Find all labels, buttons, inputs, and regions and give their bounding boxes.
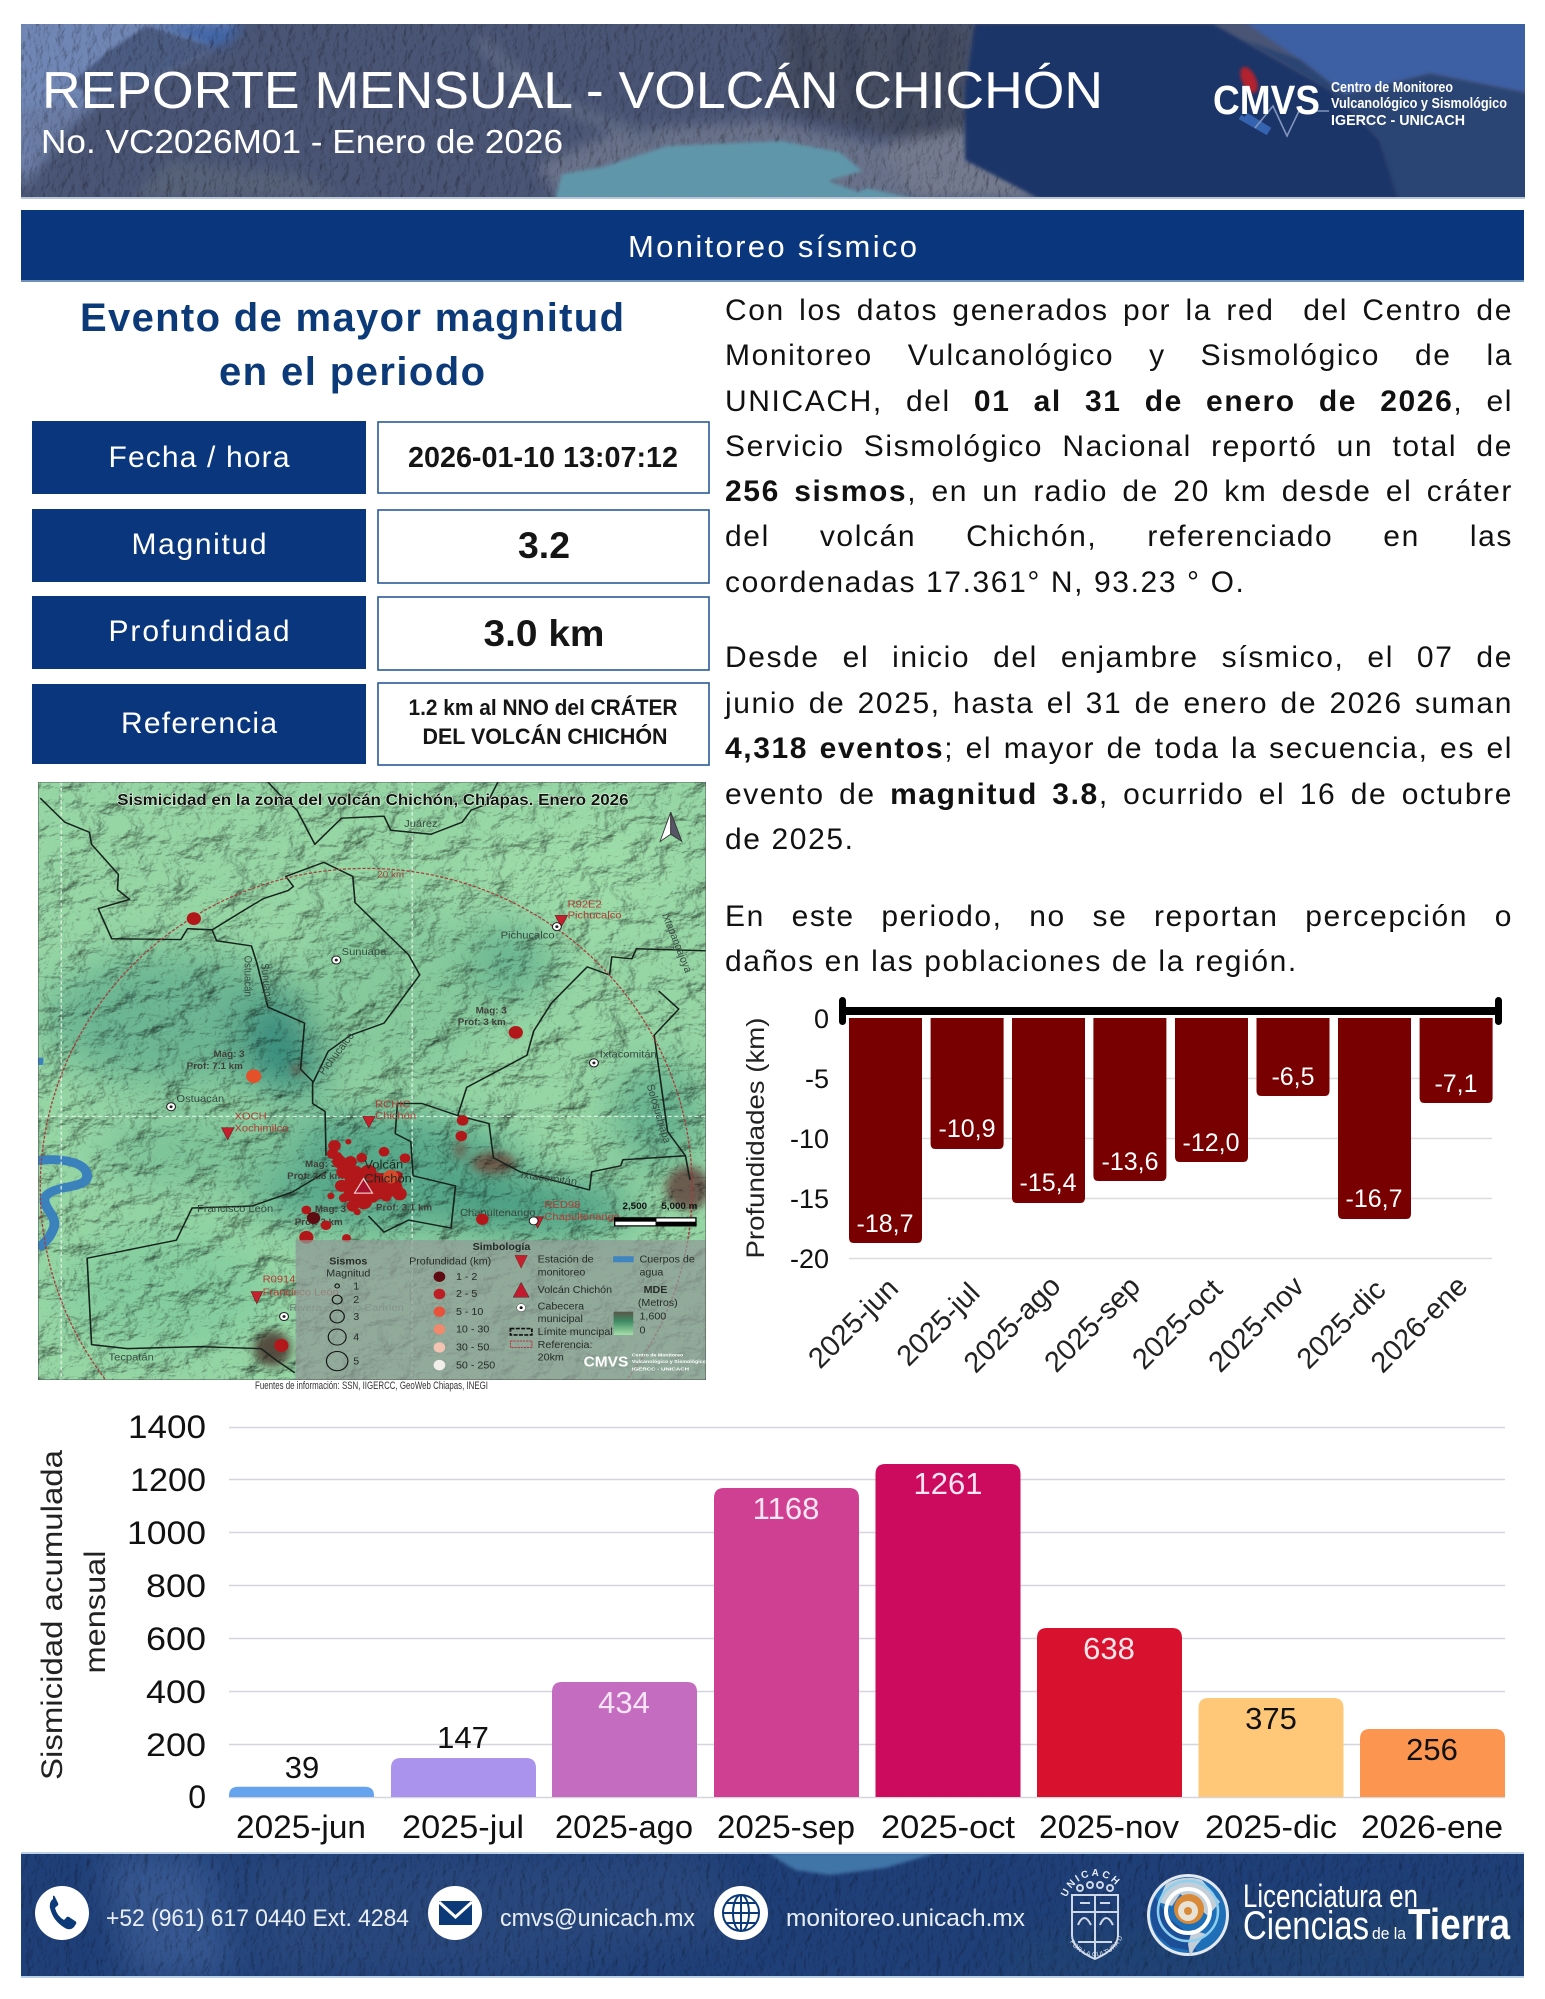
map legend: 30 - 50 [456, 1343, 490, 1354]
monthly bar values: 434 [598, 1685, 650, 1720]
CMVS logo: CMVS [1213, 77, 1320, 123]
map labels: Ixtacomitán [520, 1169, 578, 1188]
map legend: monitoreo [538, 1268, 586, 1278]
monthly y axis [127, 1409, 206, 1815]
depth bar values [857, 1063, 1478, 1238]
map labels: RCHIC [375, 1099, 411, 1110]
map legend: 20km [538, 1353, 564, 1364]
map legend: Simbología [473, 1243, 531, 1253]
monthly y axis: 400 [146, 1674, 206, 1710]
body text: evento de magnitud 3.8, ocurrido el 16 de octubre [725, 778, 1513, 811]
map legend: 1,600 [639, 1312, 667, 1323]
map legend: 2 - 5 [456, 1290, 478, 1300]
Licenciatura text: Ciencias [1243, 1904, 1369, 1948]
scale bar: 5,000 m [661, 1201, 697, 1211]
map labels: Prof: 3 km [458, 1018, 506, 1027]
map labels: Prof: 3.1 km [376, 1203, 432, 1212]
report title: REPORTE MENSUAL - VOLCÁN CHICHÓN [42, 62, 1103, 120]
volcano marker [355, 1179, 372, 1193]
contact: phone [35, 1886, 409, 1940]
header photo: crater walls [21, 24, 1525, 197]
map legend: 2 [353, 1296, 360, 1306]
monthly x axis labels: 2026-ene [1361, 1809, 1503, 1845]
scale bar: 2,500 [622, 1201, 647, 1211]
monthly y axis: 1400 [128, 1409, 206, 1445]
map legend: CMVS [584, 1354, 628, 1371]
seismic events [187, 912, 523, 1352]
depth x axis labels: 2025-ago [958, 1270, 1067, 1379]
depth x axis labels: 2026-ene [1365, 1270, 1474, 1379]
map labels: Prof: 2.8 km [287, 1171, 343, 1181]
UNICACH seal: POR LA CULTURA DE MI RAZA [1070, 1936, 1122, 1956]
Licenciatura logo [1147, 1874, 1229, 1956]
monthly bar values: 147 [437, 1720, 489, 1755]
section band: Monitoreo sísmico: Monitoreo sísmico [628, 229, 917, 264]
map legend: agua [639, 1268, 664, 1278]
row: referencia [32, 683, 709, 765]
body text: Desde el inicio del enjambre sísmico, el 07 de [725, 641, 1513, 674]
CMVS logo [1213, 64, 1507, 136]
map labels: Mag: 3 [315, 1204, 346, 1214]
footer banner [21, 1853, 1524, 1977]
heading: evento de mayor magnitud: en el periodo [219, 350, 485, 394]
seismicity map: Chichón [364, 1172, 412, 1186]
monthly y axis: 0 [188, 1779, 206, 1815]
monthly x axis labels: 2025-sep [717, 1809, 855, 1845]
map legend: Vulcanológico y Sismológico [632, 1359, 706, 1365]
monthly x axis labels: 2025-dic [1205, 1809, 1337, 1845]
row: referencia: DEL VOLCÁN CHICHÓN [422, 724, 668, 749]
north arrow [660, 812, 682, 841]
map legend: 10 - 30 [456, 1325, 490, 1335]
depth x axis labels: 2025-sep [1039, 1271, 1147, 1379]
monthly y axis: 600 [146, 1621, 206, 1657]
municipal boundaries [40, 782, 706, 1373]
map legend: IGERCC - UNICACH [632, 1367, 690, 1372]
seismicity map: Volcán [364, 1158, 403, 1171]
monthly bar values: 1261 [914, 1466, 982, 1501]
body text [724, 294, 1513, 978]
map labels: Chichón [375, 1110, 416, 1122]
map labels: Chapultenango [460, 1208, 536, 1219]
map labels: Solosuchiapa [644, 1083, 673, 1144]
map labels: Mag: 3.1 [305, 1159, 344, 1169]
body text: UNICACH, del 01 al 31 de enero de 2026, el [725, 385, 1513, 418]
terrain [38, 782, 710, 1380]
depth y axis: -15 [790, 1184, 829, 1214]
map labels: RED98 [544, 1199, 580, 1211]
map legend: Cabecera [538, 1302, 584, 1312]
contact: phone: +52 (961) 617 0440 Ext. 4284 [106, 1905, 409, 1932]
map labels: Ixtapangajoya [659, 912, 694, 974]
body text: Servicio Sismológico Nacional reportó un total de [725, 430, 1513, 463]
row: referencia: Referencia [121, 707, 277, 740]
row: referencia: 1.2 km al NNO del CRÁTER [408, 695, 678, 720]
depth bar values: -10,9 [939, 1115, 995, 1143]
map legend: MDE [644, 1285, 668, 1296]
depth x axis labels: 2025-jun [802, 1272, 905, 1375]
row: magnitud: Magnitud [132, 528, 266, 561]
monthly y axis title: Sismicidad acumulada [36, 1450, 69, 1780]
depth y axis: -10 [790, 1124, 829, 1154]
map labels: R0914 [263, 1274, 296, 1285]
map labels: R92E2 [568, 899, 602, 910]
event table [32, 421, 709, 765]
map source note: Fuentes de información: SSN, IIGERCC, GeoWeb Chiapas, INEGI [255, 1380, 488, 1392]
monthly y axis: 1000 [127, 1515, 206, 1551]
map legend: 1 - 2 [456, 1272, 478, 1283]
monthly x axis labels: 2025-ago [555, 1809, 693, 1845]
20 km reference circle [40, 868, 692, 1507]
map legend: Centro de Monitoreo [632, 1353, 683, 1359]
depth bar values: -16,7 [1346, 1185, 1402, 1213]
depth y axis [790, 1004, 829, 1274]
grid [849, 1078, 1492, 1258]
map legend: Estación de [538, 1255, 594, 1265]
depth x axis labels: 2025-nov [1203, 1270, 1311, 1379]
heading: evento de mayor magnitud [80, 296, 624, 394]
monthly bar values: 638 [1083, 1631, 1135, 1666]
seismicity map [38, 782, 706, 1380]
depth x axis labels: 2025-oct [1126, 1273, 1229, 1376]
contact: website [714, 1886, 1025, 1940]
depth bars [849, 1018, 1493, 1243]
depth x axis labels [802, 1270, 1474, 1379]
monthly y axis: 800 [146, 1568, 206, 1604]
grid [229, 1428, 1505, 1798]
contact: website: monitoreo.unicach.mx [786, 1905, 1025, 1932]
river [38, 1160, 87, 1248]
zero axis line [839, 997, 1502, 1025]
map legend: Profundidad (km) [409, 1257, 491, 1267]
body text: Monitoreo Vulcanológico y Sismológico de la [725, 339, 1513, 372]
map labels: Pichucalco [501, 930, 555, 942]
map labels: Prof: 3 km [295, 1217, 343, 1227]
map labels: Pichucalco [568, 910, 622, 921]
map labels: Sunuapa [258, 963, 273, 1003]
map labels: Ostuacán [176, 1093, 224, 1105]
map labels: Ixtacomitán [600, 1049, 657, 1061]
map legend: 4 [353, 1333, 360, 1343]
contact: email [428, 1886, 695, 1940]
map legend: 3 [353, 1313, 360, 1323]
CMVS logo: Centro de Monitoreo [1331, 80, 1453, 96]
row: profundidad [32, 596, 709, 670]
monthly x axis labels: 2025-oct [881, 1809, 1015, 1845]
depth bar values: -12,0 [1183, 1129, 1239, 1157]
map legend: Magnitud [326, 1269, 371, 1279]
depth x axis labels: 2025-dic [1291, 1274, 1392, 1375]
grid lines [38, 782, 706, 1380]
map labels: Juárez [404, 818, 438, 830]
row: fecha / hora: Fecha / hora [108, 441, 290, 474]
map labels: Pichucalco [316, 1031, 357, 1077]
body text: junio de 2025, hasta el 31 de enero de 2026 suman [725, 687, 1513, 720]
monthly seismicity bar chart [36, 1409, 1505, 1845]
map legend: Sismos [329, 1257, 368, 1267]
row: fecha / hora: 2026-01-10 13:07:12 [408, 442, 678, 474]
map labels [109, 818, 694, 1364]
depth y axis: 0 [814, 1004, 829, 1034]
header banner [21, 24, 1525, 197]
monthly y axis: 1200 [130, 1462, 206, 1498]
map labels: XOCH [234, 1111, 267, 1122]
row: profundidad: 3.0 km [484, 613, 604, 654]
map title: Sismicidad en la zona del volcán Chichón, Chiapas. Enero 2026 [117, 791, 629, 809]
map legend: Cuerpos de [639, 1255, 695, 1265]
depth bar chart [742, 997, 1502, 1379]
map labels: Rivera el Viejo Carmen [289, 1302, 404, 1314]
map labels: Ostuacán [242, 956, 253, 997]
section band: Monitoreo sísmico [21, 210, 1524, 282]
monthly bar values [285, 1466, 1458, 1785]
map legend: 5 - 10 [456, 1307, 484, 1318]
monthly x axis labels [236, 1809, 1503, 1845]
depth bar values: -7,1 [1434, 1070, 1478, 1098]
body text: 4,318 eventos; el mayor de toda la secuencia, es el [725, 732, 1513, 765]
CMVS logo: IGERCC - UNICACH [1331, 113, 1465, 129]
body text: de 2025. [725, 823, 855, 856]
scale bar [614, 1201, 697, 1226]
body text: daños en las poblaciones de la región. [725, 945, 1298, 978]
monthly x axis labels: 2025-nov [1039, 1809, 1179, 1845]
map labels: Tecpatán [109, 1352, 154, 1364]
map labels: Chapultenango [544, 1212, 620, 1223]
map legend [296, 1240, 706, 1380]
row: fecha / hora [32, 421, 709, 494]
monthly bar values: 1168 [753, 1491, 819, 1526]
map labels: Francisco León [197, 1203, 273, 1215]
map legend: 5 [353, 1357, 360, 1368]
Licenciatura text: Licenciatura en [1243, 1878, 1418, 1914]
monthly y axis title: mensual [79, 1550, 112, 1674]
map labels: 20 km [377, 870, 404, 880]
body text: del volcán Chichón, referenciado en las [725, 520, 1513, 553]
map legend: municipal [538, 1315, 583, 1325]
report number: No. VC2026M01 - Enero de 2026 [41, 123, 563, 160]
Licenciatura text [1243, 1878, 1510, 1949]
map legend: 0 [639, 1326, 646, 1336]
monthly y axis: 200 [146, 1727, 206, 1763]
map legend: Volcán Chichón [538, 1285, 612, 1296]
monthly bar values: 39 [285, 1750, 319, 1785]
map labels: Francisco León [263, 1287, 339, 1298]
Licenciatura text: de la [1372, 1924, 1406, 1943]
contact: email: cmvs@unicach.mx [500, 1905, 695, 1932]
map legend: Referencia: [538, 1340, 592, 1351]
depth bar values: -6,5 [1271, 1063, 1315, 1091]
Licenciatura text: Tierra [1408, 1900, 1510, 1949]
body text: coordenadas 17.361° N, 93.23 ° O. [725, 566, 1245, 599]
depth x axis labels: 2025-jul [891, 1277, 986, 1372]
depth y axis: -20 [790, 1244, 829, 1274]
depth y axis: -5 [805, 1064, 829, 1094]
crater lake [555, 141, 917, 199]
map labels: Xochimilco [234, 1123, 288, 1134]
body text: Con los datos generados por la red del Centro de [725, 294, 1513, 327]
map labels: Mag: 3 [213, 1049, 245, 1059]
map legend: (Metros) [638, 1298, 678, 1309]
monthly y axis title [36, 1450, 112, 1780]
UNICACH seal: UNICACH [1060, 1869, 1120, 1896]
depth y axis title: Profundidades (km) [742, 1017, 770, 1259]
map labels: Sunuapa [342, 946, 386, 958]
body text: 256 sismos, en un radio de 20 km desde el cráter [725, 475, 1513, 508]
CMVS logo: Vulcanológico y Sismológico [1331, 96, 1507, 112]
monthly bar values: 375 [1245, 1701, 1297, 1736]
depth bar values: -13,6 [1102, 1148, 1158, 1176]
body text: En este periodo, no se reportan percepción o [725, 900, 1513, 933]
monthly x axis labels: 2025-jul [402, 1809, 524, 1845]
UNICACH seal [1060, 1869, 1122, 1960]
row: magnitud [32, 509, 709, 583]
stations and towns [167, 915, 598, 1321]
map legend: 1 [353, 1282, 360, 1292]
heading: evento de mayor magnitud: Evento de mayor magnitud [80, 296, 624, 340]
map legend: 50 - 250 [456, 1361, 496, 1371]
monthly bars [229, 1464, 1505, 1797]
depth bar values: -18,7 [857, 1210, 913, 1238]
map labels: Prof: 7.1 km [187, 1061, 243, 1071]
map labels: Mag: 3 [476, 1006, 507, 1015]
monthly x axis labels: 2025-jun [236, 1809, 366, 1845]
row: magnitud: 3.2 [518, 525, 570, 566]
map legend: Límite muncipal [538, 1327, 613, 1338]
depth bar values: -15,4 [1020, 1169, 1077, 1197]
monthly bar values: 256 [1406, 1732, 1458, 1767]
row: profundidad: Profundidad [108, 615, 290, 648]
